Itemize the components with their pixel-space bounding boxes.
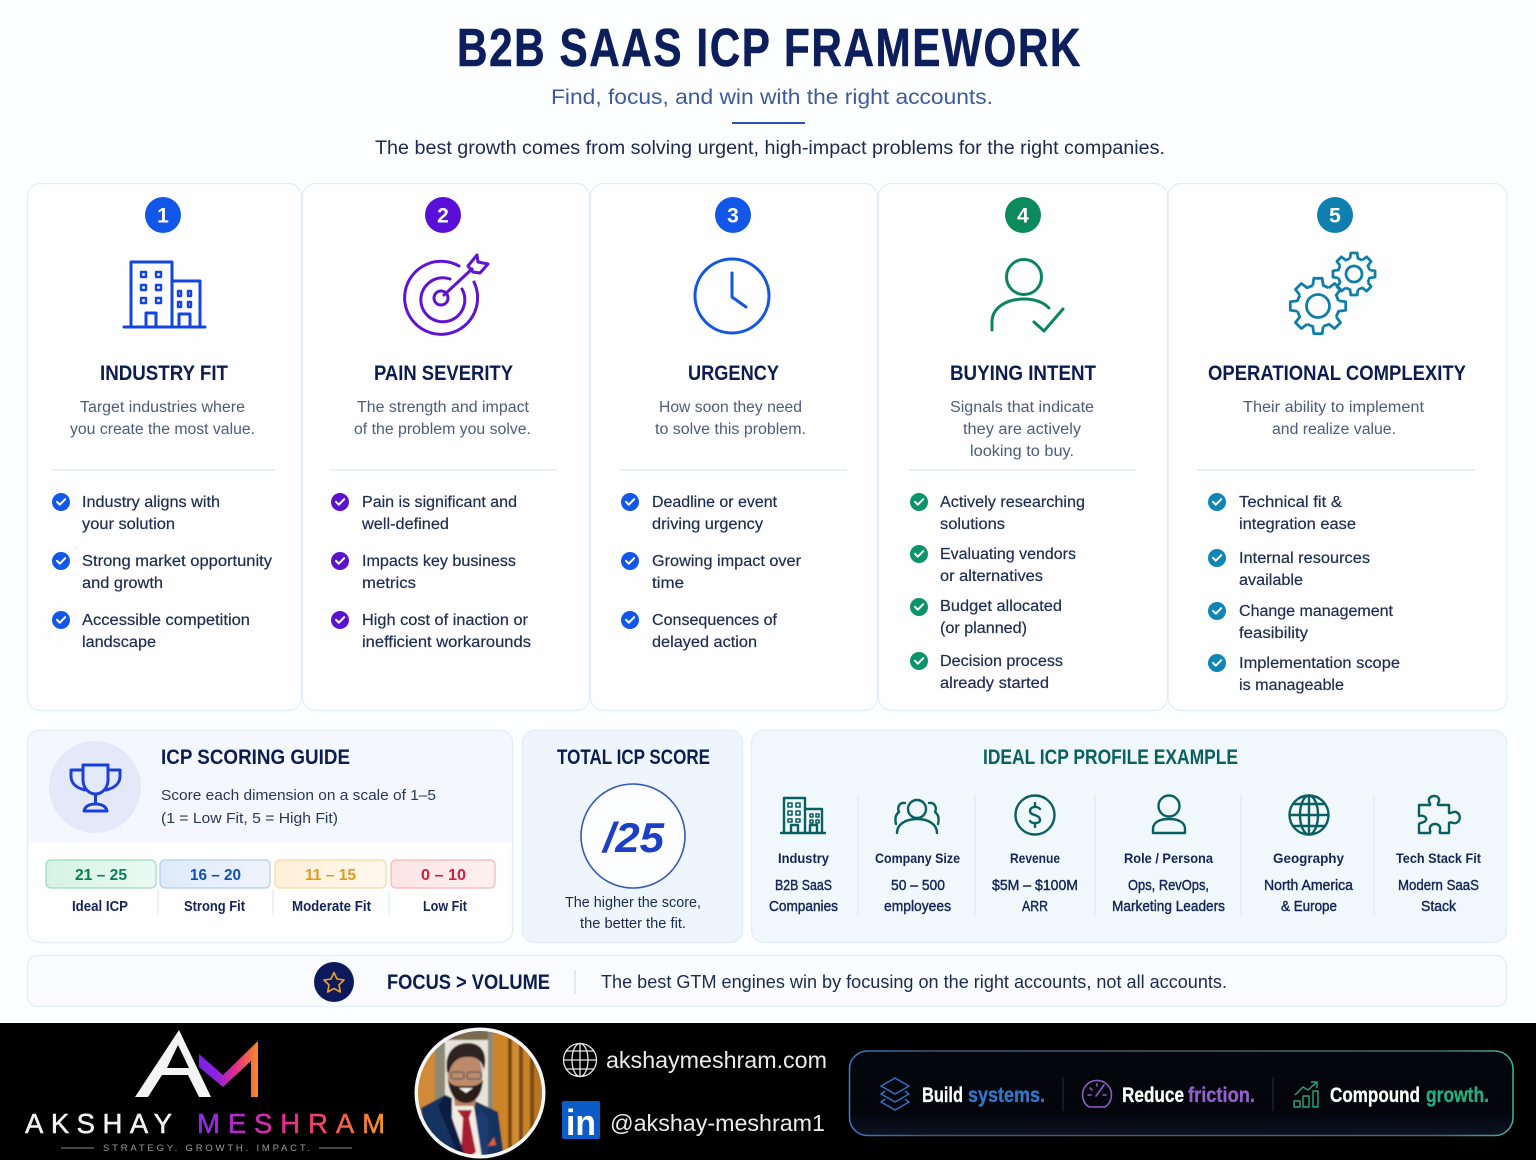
icon: star (314, 962, 354, 1002)
checklist: solutions (940, 516, 1005, 533)
checklist: Evaluating vendors (940, 546, 1076, 563)
badge 5: 5 (1329, 204, 1341, 228)
profile: industry: Industry (778, 850, 829, 866)
checklist: Decision process (940, 653, 1063, 670)
linkedin (562, 1101, 825, 1143)
description: How soon they need (659, 399, 802, 416)
score range: moderate (275, 860, 386, 915)
description (70, 399, 255, 438)
checklist: is manageable (1239, 677, 1344, 694)
checklist: Deadline or event (652, 494, 778, 511)
title: B2B SAAS ICP FRAMEWORK (457, 19, 1082, 78)
checklist: time (652, 575, 684, 592)
description: they are actively (963, 421, 1081, 438)
build systems: systems. (968, 1084, 1045, 1107)
reduce friction: Reduce (1122, 1084, 1184, 1107)
profile: revenue: Revenue (1010, 850, 1060, 866)
score circle: /25 (601, 814, 665, 861)
checklist: Change management (1239, 603, 1394, 620)
website (564, 1044, 827, 1076)
checklist: inefficient workarounds (362, 634, 531, 651)
reduce friction: friction. (1188, 1084, 1255, 1107)
checklist: driving urgency (652, 516, 763, 533)
heading: OPERATIONAL COMPLEXITY (1208, 362, 1466, 385)
score range: strong (160, 860, 270, 915)
score range: moderate: Moderate Fit (292, 899, 371, 915)
checklist (621, 493, 801, 651)
profile: geography: North America (1264, 878, 1354, 894)
checklist: Consequences of (652, 612, 778, 629)
caption (565, 895, 701, 932)
description: you create the most value. (70, 421, 255, 438)
profile: revenue: ARR (1022, 899, 1048, 915)
profile: role: Marketing Leaders (1112, 899, 1225, 915)
score range: ideal: 21 – 25 (75, 867, 127, 884)
checklist: already started (940, 675, 1049, 692)
build systems: Build (922, 1084, 963, 1107)
checklist: feasibility (1239, 625, 1308, 642)
checklist (1208, 493, 1400, 694)
score circle (581, 784, 685, 888)
profile: tech stack: Stack (1421, 899, 1457, 915)
checklist (331, 493, 531, 651)
score range: ideal: Ideal ICP (72, 899, 128, 915)
reduce friction (1082, 1080, 1255, 1107)
compound growth: growth. (1426, 1084, 1489, 1107)
badge 1: 1 (157, 204, 169, 228)
score range: strong: 16 – 20 (190, 867, 241, 884)
badge 3 (715, 197, 751, 233)
heading: BUYING INTENT (950, 362, 1096, 385)
badge 4 (1005, 197, 1041, 233)
badge 4: 4 (1017, 204, 1029, 228)
description (354, 399, 531, 438)
logo (25, 1030, 385, 1154)
profile: company size: employees (884, 899, 951, 915)
description (655, 399, 806, 438)
description: to solve this problem. (655, 421, 806, 438)
description: of the problem you solve. (354, 421, 531, 438)
icon: person check (992, 260, 1063, 331)
profile: revenue (992, 796, 1078, 915)
checklist: delayed action (652, 634, 757, 651)
profile: industry: B2B SaaS (775, 878, 832, 894)
score range: ideal (46, 860, 156, 915)
profile: revenue: $5M – $100M (992, 878, 1078, 894)
checklist: Pain is significant and (362, 494, 517, 511)
panel: pain severity (302, 184, 590, 710)
portrait (414, 1028, 546, 1158)
panel: total score (522, 730, 742, 942)
description: and realize value. (1272, 421, 1396, 438)
heading: ICP SCORING GUIDE (161, 746, 350, 769)
panel: urgency (590, 184, 878, 710)
profile: role: Ops, RevOps, (1128, 878, 1209, 894)
tagline panel (850, 1051, 1513, 1136)
panel: buying intent (878, 184, 1168, 710)
profile: company size (875, 800, 960, 915)
profile: industry: Companies (769, 899, 838, 915)
checklist: Technical fit & (1239, 494, 1343, 511)
badge 2: 2 (437, 204, 449, 228)
profile: role (1112, 796, 1225, 915)
checklist: Growing impact over (652, 553, 801, 570)
description: (1 = Low Fit, 5 = High Fit) (161, 810, 338, 827)
tagline: The best growth comes from solving urgent, high-impact problems for the right companies. (375, 138, 1165, 159)
checklist (52, 493, 272, 651)
checklist: or alternatives (940, 568, 1043, 585)
checklist: well-defined (361, 516, 449, 533)
checklist: landscape (82, 634, 156, 651)
caption: the better the fit. (580, 916, 686, 932)
profile: role: Role / Persona (1124, 850, 1213, 866)
profile: industry (769, 798, 838, 915)
description: Score each dimension on a scale of 1–5 (161, 787, 436, 804)
description (161, 787, 436, 827)
compound growth (1294, 1082, 1489, 1107)
footer (0, 1023, 1536, 1160)
profile: tech stack: Modern SaaS (1398, 878, 1479, 894)
checklist: your solution (82, 516, 175, 533)
score range: moderate: 11 – 15 (305, 867, 356, 884)
badge 2 (425, 197, 461, 233)
score range: low: 0 – 10 (421, 867, 466, 884)
linkedin: in (566, 1102, 596, 1143)
checklist: Actively researching (940, 494, 1085, 511)
checklist: Accessible competition (82, 612, 250, 629)
icon: buildings (124, 262, 205, 327)
checklist (910, 493, 1085, 692)
logo: MESHRAM (197, 1108, 385, 1139)
description: Their ability to implement (1243, 399, 1425, 416)
profile: company size: Company Size (875, 850, 960, 866)
profile: company size: 50 – 500 (891, 878, 945, 894)
logo: AKSHAY (25, 1108, 172, 1139)
checklist: Strong market opportunity (82, 553, 272, 570)
checklist: High cost of inaction or (362, 612, 528, 629)
focus heading: FOCUS > VOLUME (387, 971, 550, 994)
description (1243, 399, 1425, 438)
score range: low (391, 860, 495, 915)
badge 3: 3 (727, 204, 739, 228)
subtitle: Find, focus, and win with the right accounts. (551, 86, 993, 109)
heading: IDEAL ICP PROFILE EXAMPLE (983, 746, 1238, 769)
icon: gears (1290, 253, 1375, 334)
badge 1 (145, 197, 181, 233)
panel: industry fit (28, 184, 302, 710)
checklist: Industry aligns with (82, 494, 220, 511)
description: looking to buy. (970, 443, 1074, 460)
icon: clock (695, 259, 769, 333)
description: Target industries where (80, 399, 245, 416)
checklist: and growth (82, 575, 163, 592)
profile: tech stack (1396, 796, 1481, 915)
description: The strength and impact (357, 399, 530, 416)
checklist: Internal resources (1239, 550, 1370, 567)
linkedin: @akshay-meshram1 (610, 1110, 825, 1136)
checklist: (or planned) (940, 620, 1027, 637)
description: Signals that indicate (950, 399, 1094, 416)
profile: geography: & Europe (1281, 899, 1337, 915)
panel: ideal profile (752, 730, 1506, 942)
focus bar (28, 956, 1506, 1006)
checklist: integration ease (1239, 516, 1356, 533)
score range: low: Low Fit (423, 899, 467, 915)
caption: The higher the score, (565, 895, 701, 911)
heading: INDUSTRY FIT (100, 362, 228, 385)
header (375, 19, 1165, 159)
compound growth: Compound (1330, 1084, 1420, 1107)
checklist: metrics (362, 575, 416, 592)
build systems (881, 1078, 1045, 1110)
profile: tech stack: Tech Stack Fit (1396, 850, 1481, 866)
description (950, 399, 1094, 460)
score range: strong: Strong Fit (184, 899, 245, 915)
profile: geography (1264, 796, 1354, 915)
icon: trophy (49, 741, 141, 833)
checklist: available (1239, 572, 1303, 589)
checklist: Implementation scope (1239, 655, 1400, 672)
checklist: Budget allocated (940, 598, 1062, 615)
profile: geography: Geography (1273, 850, 1344, 866)
focus message: The best GTM engines win by focusing on the right accounts, not all accounts. (601, 972, 1227, 992)
checklist: Impacts key business (362, 553, 516, 570)
heading: PAIN SEVERITY (374, 362, 513, 385)
heading: TOTAL ICP SCORE (557, 746, 710, 769)
logo: STRATEGY. GROWTH. IMPACT. (103, 1143, 310, 1154)
heading: URGENCY (688, 362, 779, 385)
website: akshaymeshram.com (606, 1047, 827, 1073)
panel: operational complexity (1168, 184, 1507, 710)
panel: scoring guide (28, 730, 512, 942)
icon: target (405, 255, 488, 334)
badge 5 (1317, 197, 1353, 233)
